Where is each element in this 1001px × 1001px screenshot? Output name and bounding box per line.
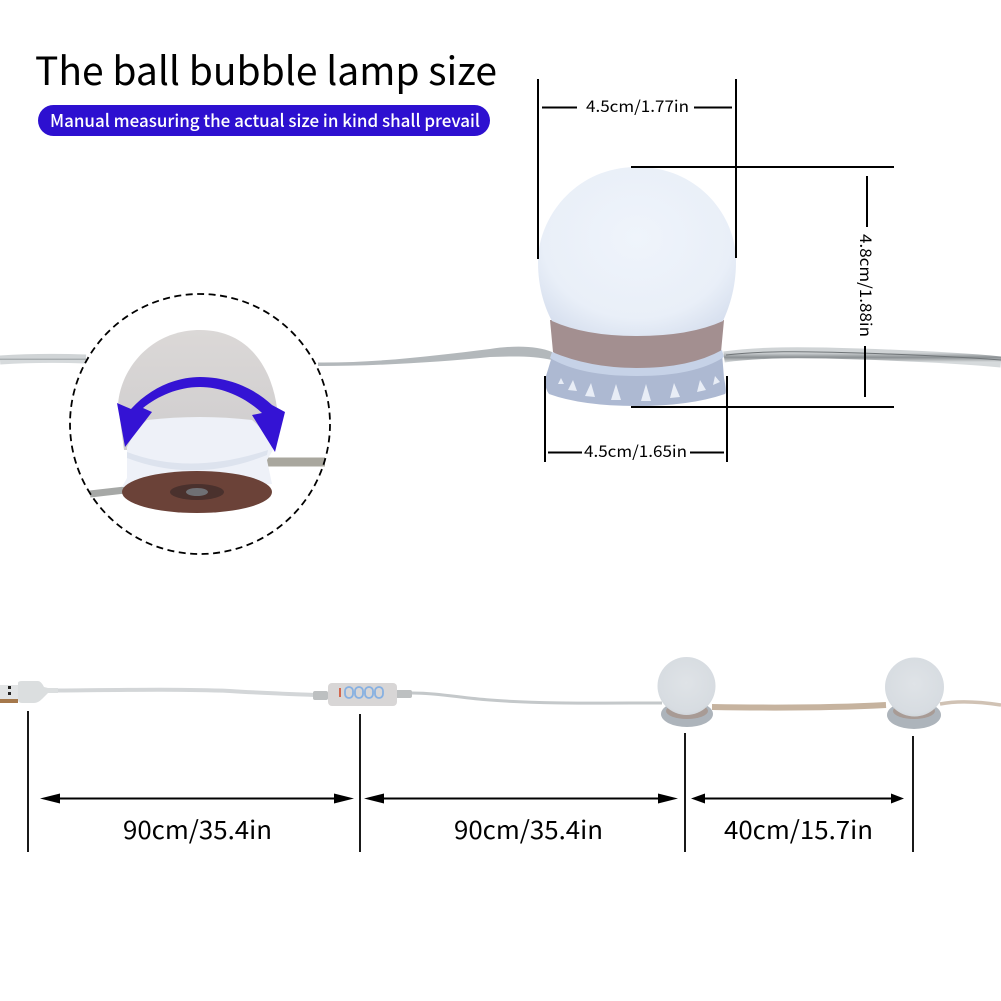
- label: first length: 90cm/35.4in: [123, 811, 272, 847]
- cable to controller: [58, 690, 315, 695]
- dimension: lamp height: 4.8cm/1.88in: [855, 234, 879, 337]
- lamp dome: [538, 167, 736, 336]
- main bubble lamp photo: [538, 167, 736, 406]
- subtitle pill: Manual measuring the actual size in kind shall prevail: [50, 108, 480, 133]
- arrow: rotation direction: [117, 377, 285, 452]
- dashed detail circle: [70, 294, 330, 554]
- lamp base notches: [558, 376, 720, 401]
- dimension: base width: [545, 376, 727, 462]
- cable to first lamp: [412, 693, 662, 703]
- dimension: dome width: [538, 79, 736, 259]
- controller: [313, 691, 328, 700]
- lamp base: [545, 353, 726, 406]
- arrow: segment 1: [40, 794, 354, 804]
- label: third length: 40cm/15.7in: [724, 811, 873, 847]
- detail brown base: [122, 471, 272, 513]
- usb housing: [18, 681, 58, 703]
- dimension: base width: 4.5cm/1.65in: [584, 438, 687, 462]
- usb cable: [0, 681, 662, 706]
- main lamp cable: [318, 347, 1001, 366]
- controller buttons: [345, 687, 383, 698]
- cable after last lamp: [940, 702, 1001, 705]
- arrow: segment 3: [691, 794, 904, 804]
- detail dome: [118, 330, 277, 450]
- detail white collar: [122, 417, 273, 487]
- detail cable left: [0, 358, 86, 360]
- dimension: lamp height: [631, 167, 894, 407]
- lamp collar: [550, 320, 724, 368]
- cable length dimension lines: [28, 711, 913, 852]
- detail wires: [90, 490, 125, 494]
- small lamp 1: [658, 657, 716, 727]
- rotation detail lamp: [90, 330, 325, 513]
- label: second length: 90cm/35.4in: [454, 811, 603, 847]
- arrow: segment 2: [364, 794, 678, 804]
- small lamp 2: [885, 658, 944, 729]
- usb plug: [0, 685, 18, 700]
- title: The ball bubble lamp size: [35, 41, 497, 97]
- dimension: dome width: 4.5cm/1.77in: [586, 93, 689, 117]
- cable between lamps: [712, 705, 886, 708]
